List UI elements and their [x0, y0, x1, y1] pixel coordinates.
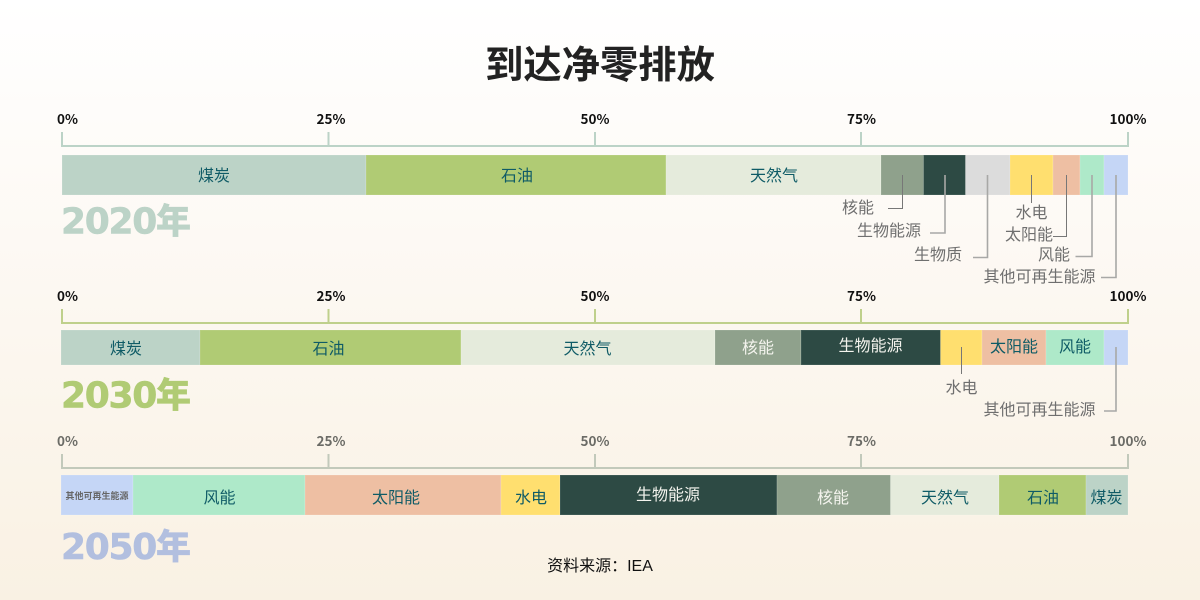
source note: 资料来源：IEA: [547, 557, 653, 575]
stacked bar: 2050: 风能: [203, 489, 236, 507]
axis: 2020: 0%: [57, 108, 78, 128]
callouts: 2030: [945, 347, 1116, 419]
callouts: 2030: 水电: [945, 379, 978, 397]
stacked bar: 2020: 天然气: [750, 167, 798, 185]
callouts: 2020: 核能: [842, 199, 874, 217]
axis: 2020: 25%: [317, 108, 345, 128]
stacked bar: 2030: 太阳能: [990, 338, 1038, 356]
callouts: 2020: 生物能源: [857, 222, 921, 240]
callouts: 2020: 水电: [1015, 204, 1048, 222]
callouts: 2030: 其他可再生能源: [983, 401, 1096, 419]
stacked bar: 2020: 石油: [501, 167, 533, 185]
axis: 2020: [57, 108, 1146, 146]
axis: 2050: 75%: [847, 430, 876, 450]
callouts: 2020: 风能: [1038, 246, 1070, 264]
axis: 2020: 50%: [581, 108, 609, 128]
axis: 2030: 50%: [581, 285, 609, 305]
axis: 2030: 100%: [1110, 285, 1146, 305]
callouts: 2020: 其他可再生能源: [983, 268, 1096, 286]
callouts: 2020: 太阳能: [1005, 226, 1053, 244]
axis: 2020: 100%: [1110, 108, 1146, 128]
stacked bar: 2030: 天然气: [563, 340, 612, 358]
axis: 2020: 75%: [847, 108, 876, 128]
stacked bar: 2030: 风能: [1059, 338, 1091, 356]
callouts: 2020: [842, 175, 1116, 286]
stacked bar: 2050: 石油: [1027, 489, 1059, 507]
stacked bar: 2030: 生物能源: [838, 337, 903, 355]
title: 到达净零排放: [485, 44, 715, 87]
stacked bar: 2050: [61, 475, 1128, 515]
stacked bar: 2050: 天然气: [921, 489, 969, 507]
year label: 2030: 2030年: [61, 368, 191, 418]
axis: 2050: 50%: [581, 430, 609, 450]
axis: 2030: 75%: [847, 285, 876, 305]
stacked bar: 2050: 生物能源: [636, 486, 700, 504]
axis: 2050: 25%: [317, 430, 345, 450]
panel: 2030: [57, 285, 1146, 419]
axis: 2050: 0%: [57, 430, 78, 450]
panel: 2020: [57, 108, 1146, 286]
stacked bar: 2030: [61, 330, 1128, 365]
stacked bar: 2030: 核能: [742, 339, 774, 357]
callouts: 2020: 生物质: [914, 246, 962, 264]
year label: 2050: 2050年: [61, 519, 191, 570]
stacked bar: 2030: 煤炭: [110, 340, 142, 358]
axis: 2050: 100%: [1110, 430, 1146, 450]
stacked bar: 2020: [62, 155, 1128, 195]
axis: 2030: 25%: [317, 285, 345, 305]
stacked bar: 2050: 煤炭: [1090, 489, 1123, 507]
axis: 2030: 0%: [57, 285, 78, 305]
stacked bar: 2050: 太阳能: [372, 489, 420, 507]
stacked bar: 2030: 石油: [312, 340, 345, 358]
axis: 2030: [57, 285, 1146, 323]
stacked bar: 2020: 煤炭: [198, 167, 230, 185]
panel: 2050: [57, 430, 1146, 570]
stacked bar: 2050: 其他可再生能源: [65, 490, 129, 501]
stacked bar: 2050: 水电: [515, 489, 547, 507]
stacked bar: 2050: 核能: [817, 489, 849, 507]
year label: 2020: 2020年: [61, 194, 191, 244]
axis: 2050: [57, 430, 1146, 468]
